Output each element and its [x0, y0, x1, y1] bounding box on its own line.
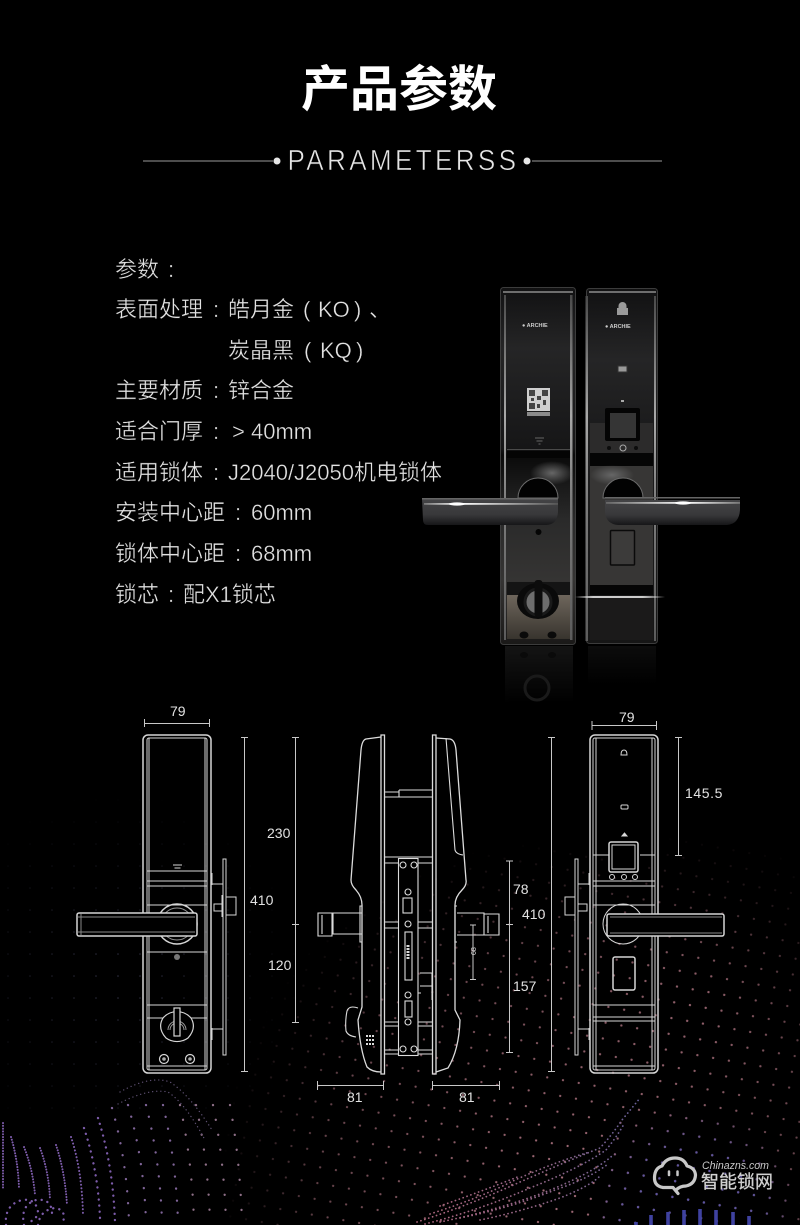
dimension labels: right	[619, 709, 723, 801]
parameter list: )	[354, 297, 361, 322]
dimension labels: left: 410	[250, 892, 274, 908]
parameter list: :	[213, 378, 219, 403]
dimension labels: left	[170, 703, 292, 973]
dimension labels: center	[347, 881, 546, 1105]
side plate	[223, 859, 226, 1055]
diagram: left dimensions	[144, 719, 299, 1072]
parameter list: 68mm	[251, 541, 312, 566]
handle	[77, 913, 197, 936]
cover plate	[613, 957, 635, 990]
side plate	[575, 859, 578, 1055]
parameter list: 锁芯	[115, 582, 159, 607]
diagram: center side view	[318, 735, 499, 1074]
handle	[607, 914, 724, 936]
diagram: right front view	[565, 735, 724, 1073]
parameter list: )	[356, 338, 363, 363]
dimension labels: right: 79	[619, 709, 635, 725]
parameter list: 40mm	[251, 419, 312, 444]
dotted background pattern	[2, 822, 800, 1225]
title: 产品参数	[301, 63, 497, 117]
parameter list: >	[232, 419, 245, 444]
parameter list: 安装中心距	[115, 500, 225, 525]
subtitle: PARAMETERSS: PARAMETERSS	[288, 144, 519, 176]
subtitle: PARAMETERSS	[143, 144, 662, 176]
parameter list	[115, 257, 442, 607]
handle rosette	[603, 904, 643, 944]
diagram: center dimensions	[318, 737, 555, 1090]
dimension labels: center: 68	[471, 947, 478, 955]
parameter list: (	[304, 338, 312, 363]
watermark logo	[654, 1158, 773, 1194]
right body	[432, 735, 436, 1074]
dimension labels: center: 410	[522, 906, 546, 922]
icon: bell	[621, 750, 627, 755]
right panel: ● ARCHIE	[605, 324, 631, 330]
parameter list: 配X1锁芯	[183, 582, 276, 607]
right handle	[605, 497, 740, 525]
dimension labels: left: 79	[170, 703, 186, 719]
parameter list: 皓月金	[228, 297, 294, 322]
key cylinder	[161, 1012, 193, 1042]
parameter list: 炭晶黑	[228, 338, 294, 363]
reflection	[505, 646, 656, 704]
dimension labels: center: 81	[347, 1089, 363, 1105]
parameter list: 参数	[115, 257, 159, 282]
left panel	[500, 288, 576, 644]
parameter list: :	[168, 257, 174, 282]
parameter list: 主要材质	[115, 378, 203, 403]
parameter list: 适用锁体	[115, 460, 203, 485]
parameter list: KO	[318, 297, 350, 322]
parameter list: :	[235, 500, 241, 525]
parameter list: 适合门厚	[115, 419, 203, 444]
mortise	[398, 858, 418, 1056]
dimension labels: right: 145.5	[685, 785, 723, 801]
icon: cloud face	[654, 1158, 696, 1194]
right handle	[455, 906, 499, 942]
parameter list: 表面处理	[115, 297, 203, 322]
parameter list: (	[303, 297, 311, 322]
parameter list: :	[213, 297, 219, 322]
dimension labels: center: 157	[513, 978, 537, 994]
watermark logo: Chinazns.com	[702, 1160, 769, 1172]
parameter list: :	[168, 582, 174, 607]
parameter list: :	[213, 419, 219, 444]
dimension labels: left: 120	[268, 957, 292, 973]
handle rosette	[157, 904, 197, 944]
parameter list: 、	[369, 297, 391, 322]
parameter list: 60mm	[251, 500, 312, 525]
fingerprint reader	[609, 842, 638, 872]
parameter list: 锌合金	[228, 378, 294, 403]
dimension labels: center: 81	[459, 1089, 475, 1105]
parameter list: KQ	[320, 338, 352, 363]
left panel: ● ARCHIE	[522, 323, 548, 329]
dimension labels: left: 230	[267, 825, 291, 841]
left handle	[318, 906, 362, 942]
left body	[351, 737, 381, 1072]
parameter list: 锁体中心距	[115, 541, 225, 566]
parameter list: :	[235, 541, 241, 566]
left handle	[422, 498, 558, 525]
product photo: lock	[422, 288, 740, 704]
diagram: right dimensions	[592, 721, 682, 856]
dimension labels: center: 78	[513, 881, 529, 897]
spindles	[384, 790, 433, 1054]
parameter list: J2040/J2050机电锁体	[228, 460, 442, 485]
icon: wifi mark	[173, 865, 182, 871]
right panel	[575, 288, 665, 644]
parameter list: :	[213, 460, 219, 485]
diagram: left front view	[77, 735, 236, 1073]
watermark logo: 智能锁网	[701, 1172, 773, 1192]
